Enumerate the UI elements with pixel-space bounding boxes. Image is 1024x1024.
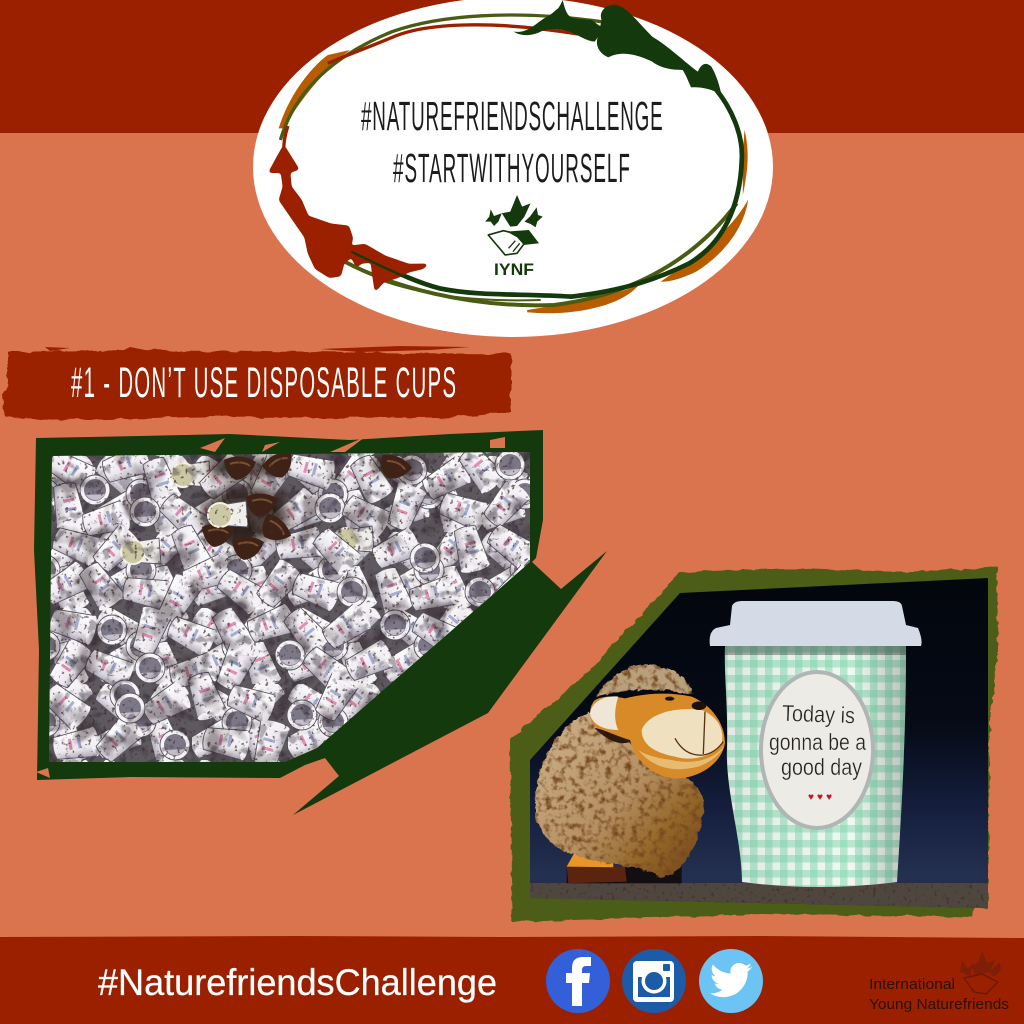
banner: tip title: #1 - DON’T USE DISPOSABLE CUPS (71, 360, 456, 407)
frame notches (36, 437, 505, 778)
white oval badge (253, 0, 773, 337)
cup lid (710, 601, 922, 646)
headline hashtags (361, 93, 663, 191)
cup label (761, 672, 873, 828)
photo panel: disposable cups with arrow frame (34, 430, 607, 815)
banner: tip title (3, 346, 511, 420)
night backdrop (520, 570, 990, 910)
IYNF logo (485, 195, 543, 279)
icon: facebook (546, 949, 610, 1013)
footer organisation logo (869, 951, 1009, 1013)
IYNF logo: IYNF (494, 261, 534, 279)
top band (0, 0, 1024, 133)
footer organisation logo: Young Naturefriends (869, 996, 1009, 1013)
photo panel: reusable cup and sheep (510, 568, 998, 922)
cups photo (49, 452, 530, 762)
reusable cup: good day (781, 754, 862, 780)
green frame with arrow (34, 430, 607, 815)
reusable cup: ♥♥♥ (808, 792, 832, 803)
icon: twitter (699, 949, 763, 1013)
sheep figurine (535, 665, 725, 883)
ground (520, 883, 990, 910)
olive frame (510, 568, 998, 922)
reusable cup: Today is (782, 700, 855, 728)
headline hashtags: #NATUREFRIENDSCHALLENGE (361, 93, 663, 139)
icon: instagram (622, 949, 686, 1013)
footer organisation logo: International (869, 976, 955, 993)
footer hashtag: #NaturefriendsChallenge (98, 962, 497, 1003)
headline hashtags: #STARTWITHYOURSELF (393, 145, 630, 191)
wreath (269, 0, 748, 313)
reusable cup (710, 601, 922, 887)
footer band (0, 936, 1024, 1024)
reusable cup: gonna be a (769, 729, 866, 755)
